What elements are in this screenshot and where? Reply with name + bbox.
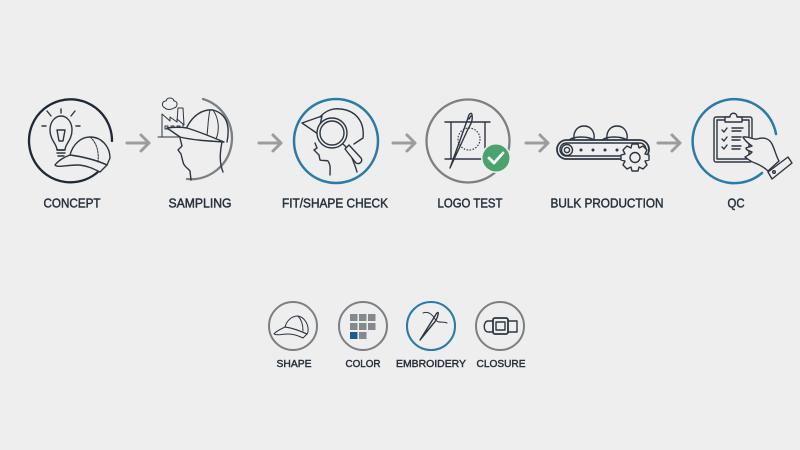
option: color <box>339 302 387 370</box>
arrow 4 <box>526 135 548 151</box>
ring: concept <box>29 99 112 182</box>
step: fit/shape check <box>282 99 389 210</box>
icon: needle and thread <box>420 312 447 340</box>
icon: cap <box>274 316 308 338</box>
icon: gear <box>621 144 649 171</box>
step: concept <box>29 99 112 210</box>
ring: qc <box>693 99 776 183</box>
icon: clipboard <box>714 113 752 162</box>
ring: color <box>339 302 387 350</box>
label: qc: QC <box>728 196 744 210</box>
option: shape <box>269 302 317 370</box>
icon: two caps <box>569 126 627 140</box>
label: embroidery: EMBROIDERY <box>396 358 466 370</box>
ring: logo test <box>426 100 510 182</box>
icon: cap <box>55 137 110 172</box>
icon: embroidery hoop <box>445 122 490 159</box>
label: concept: CONCEPT <box>44 196 101 210</box>
ring: closure <box>476 302 524 350</box>
ring: fit check <box>294 99 378 183</box>
step: bulk production <box>550 126 664 210</box>
step: qc <box>693 99 792 210</box>
label: logo test: LOGO TEST <box>438 196 503 210</box>
icon: head with cap <box>302 109 363 175</box>
label: sampling: SAMPLING <box>168 196 232 210</box>
step: sampling <box>158 98 232 210</box>
icon: light bulb <box>42 109 80 156</box>
step: logo test <box>426 100 511 210</box>
ring: embroidery <box>407 302 455 350</box>
label: closure: CLOSURE <box>476 358 526 370</box>
option: embroidery <box>396 302 466 370</box>
icon: green check badge <box>481 143 511 173</box>
icon: swatch grid <box>350 314 376 339</box>
label: color: COLOR <box>346 358 381 370</box>
icon: head with cap <box>167 110 228 180</box>
arrow 5 <box>658 135 680 151</box>
icon: dashed logo <box>458 128 480 150</box>
icon: magnifier <box>317 118 362 164</box>
label: shape: SHAPE <box>276 358 312 370</box>
option: closure <box>476 302 526 370</box>
label: fit/shape check: FIT/SHAPE CHECK <box>282 196 389 210</box>
icon: factory <box>158 98 187 137</box>
icon: needle <box>450 113 472 168</box>
ring: sampling <box>187 99 232 179</box>
icon: pointing hand <box>743 137 792 179</box>
icon: belt buckle <box>484 318 517 334</box>
label: bulk production: BULK PRODUCTION <box>550 196 664 210</box>
ring: shape <box>269 302 317 350</box>
arrow 3 <box>393 135 415 151</box>
icon: conveyor belt <box>557 140 649 159</box>
arrow 2 <box>259 135 281 151</box>
arrow 1 <box>127 135 149 151</box>
